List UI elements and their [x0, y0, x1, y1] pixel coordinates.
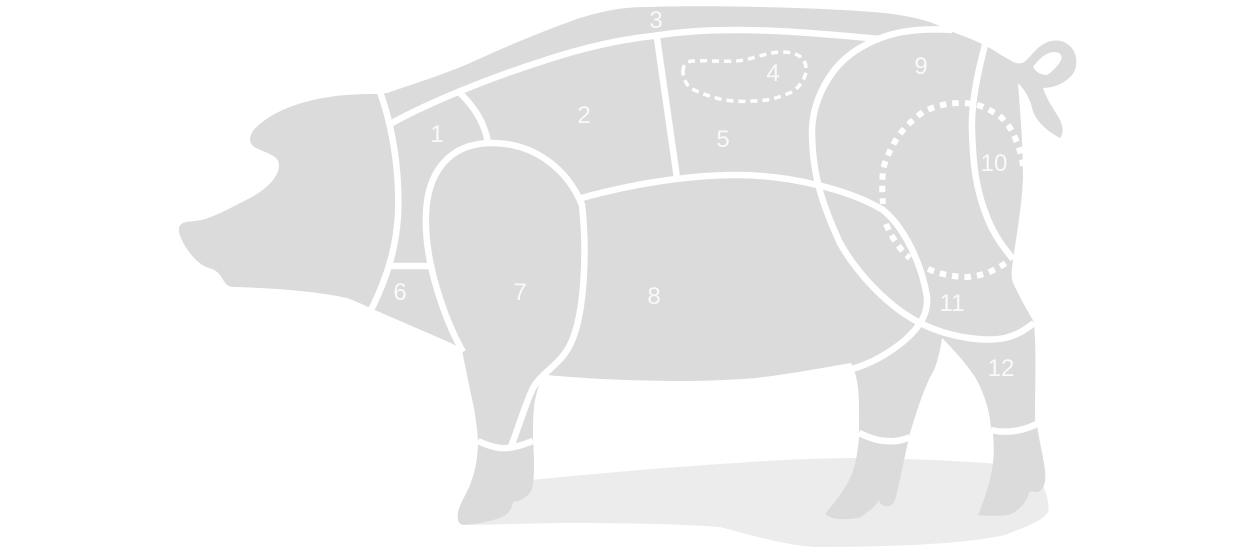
divider between cuts 1 and 2 — [460, 93, 488, 142]
label 10: 10 — [981, 150, 1007, 177]
hind arc — [812, 29, 1034, 339]
numeric labels — [393, 7, 1014, 382]
label 11: 11 — [940, 290, 964, 317]
middle leg band — [859, 433, 910, 441]
label 9: 9 — [914, 53, 928, 80]
neck crosspiece — [391, 263, 430, 269]
label 7: 7 — [513, 279, 527, 306]
back strip line — [392, 30, 880, 123]
foreleg band — [478, 441, 533, 448]
label 2: 2 — [577, 102, 591, 129]
cut lines — [371, 29, 1037, 449]
ham line — [972, 45, 1013, 259]
hind leg band — [991, 424, 1037, 432]
dotted outline: cut 4 — [683, 52, 806, 101]
divider between cuts 2 and 5 — [657, 38, 677, 178]
front leg arc — [426, 143, 584, 449]
neck line — [371, 92, 398, 310]
label 12: 12 — [988, 355, 1014, 382]
label 5: 5 — [716, 126, 730, 153]
pig silhouette — [179, 6, 1076, 525]
label 8: 8 — [647, 283, 661, 310]
belly arc — [578, 175, 927, 369]
label 1: 1 — [430, 121, 444, 148]
ground shadow — [470, 458, 1049, 547]
label 3: 3 — [649, 7, 663, 34]
dotted outline: cut 10 — [882, 103, 1023, 277]
label 6: 6 — [393, 279, 407, 306]
label 4: 4 — [766, 60, 780, 87]
